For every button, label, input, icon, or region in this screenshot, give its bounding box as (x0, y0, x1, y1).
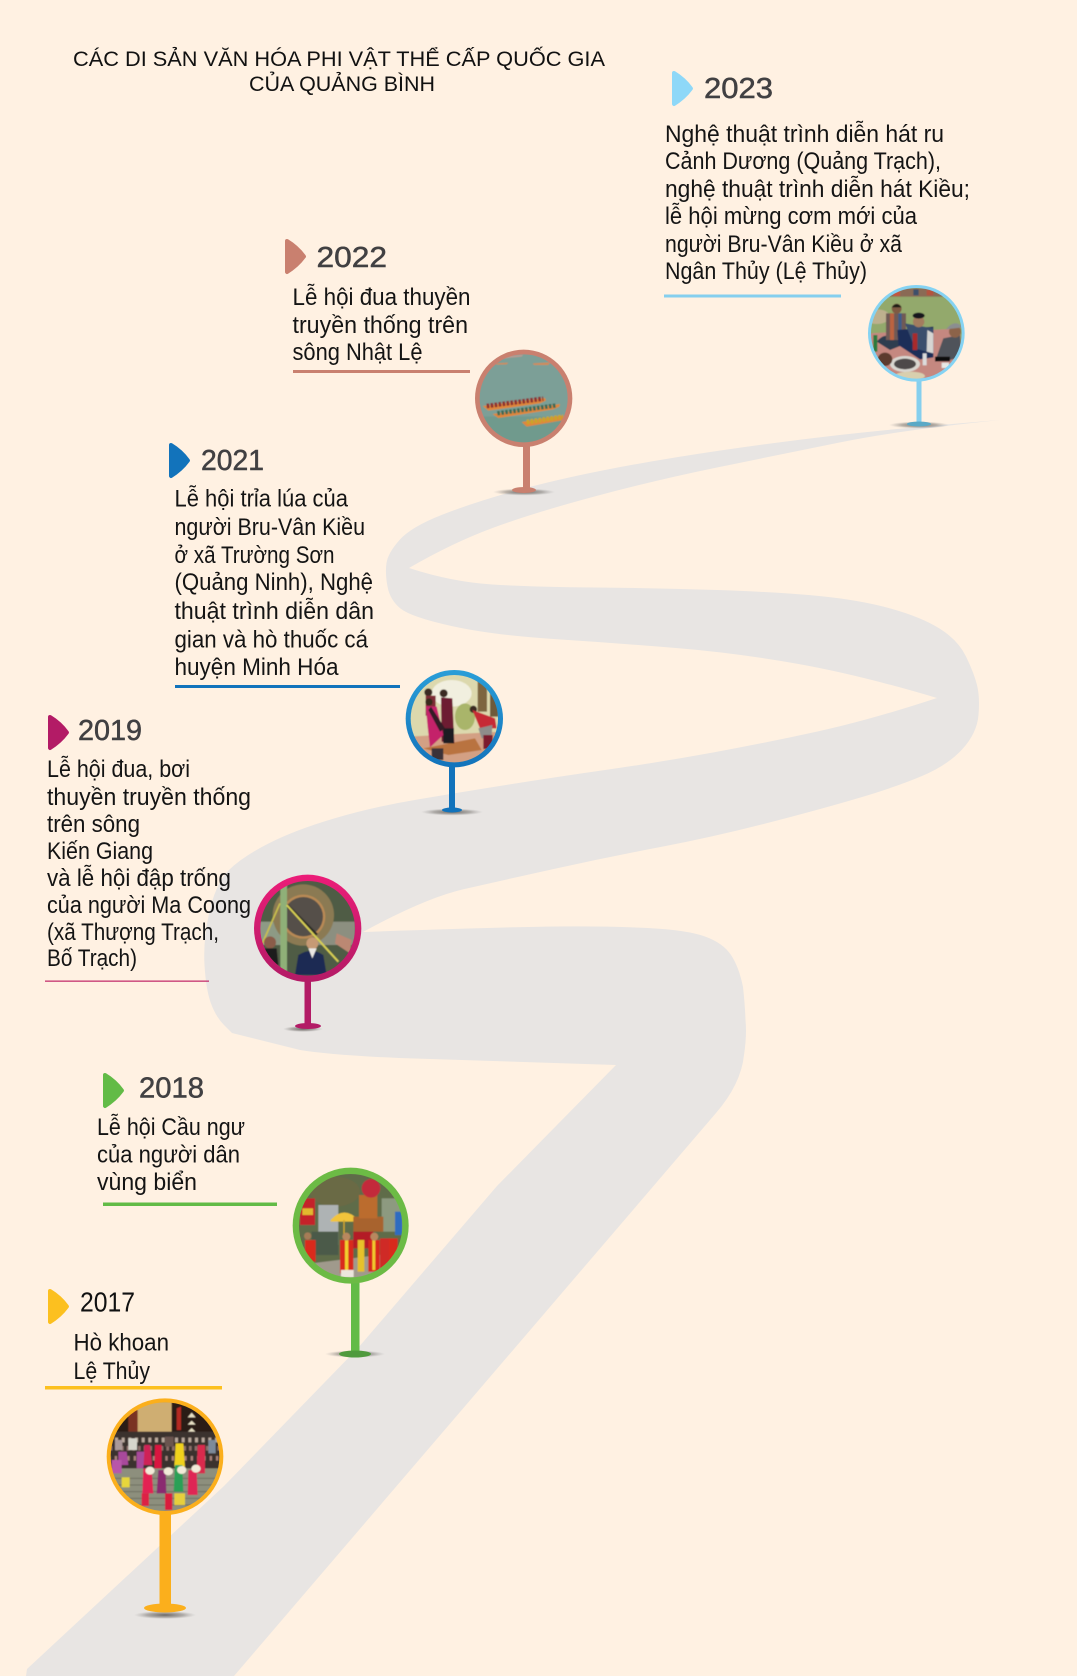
year 2021: 2021 (201, 445, 264, 477)
text 2021: thuật trình diễn dân (174, 598, 374, 625)
text 2023: Ngân Thủy (Lệ Thủy) (665, 258, 867, 285)
underline 2022 (293, 370, 470, 373)
underline 2018 (103, 1202, 277, 1206)
year 2023: 2023 (704, 73, 773, 105)
pin 2021 (406, 670, 503, 816)
text 2023: người Bru-Vân Kiều ở xã (665, 231, 903, 258)
pin 2019 (254, 875, 361, 1032)
title (73, 47, 605, 96)
icon: arrow 2019 (50, 717, 67, 748)
year 2019: 2019 (78, 715, 142, 747)
underline 2017 (45, 1386, 222, 1390)
milestone 2017 (45, 1286, 223, 1619)
milestone 2022 (287, 241, 573, 496)
text 2023 (665, 121, 970, 285)
text 2021: (Quảng Ninh), Nghệ (174, 569, 373, 596)
text 2021: ở xã Trường Sơn (174, 542, 334, 569)
pin 2018 (293, 1168, 409, 1358)
text 2019: Kiến Giang (47, 838, 153, 865)
icon: arrow 2023 (674, 73, 691, 104)
text 2021: Lễ hội trỉa lúa của (174, 486, 349, 512)
text 2019: thuyền truyền thống (47, 784, 251, 811)
text 2019: trên sông (47, 811, 140, 838)
icon: arrow 2018 (105, 1075, 122, 1106)
text 2021: gian và hò thuốc cá (174, 626, 369, 654)
text 2018: của người dân (97, 1142, 240, 1168)
year 2017: 2017 (80, 1286, 135, 1318)
photo: Bru-Van Kieu elders (863, 283, 967, 383)
milestone 2023 (664, 73, 970, 428)
text 2021 (174, 486, 374, 681)
pin 2017 (107, 1398, 223, 1619)
text 2019: và lễ hội đập trống (47, 865, 231, 892)
text 2023: Cảnh Dương (Quảng Trạch), (665, 148, 941, 175)
pin 2023 (863, 283, 967, 428)
title: CÁC DI SẢN VĂN HÓA PHI VẬT THỂ CẤP QUỐC GIA (73, 47, 605, 71)
milestone 2021 (171, 445, 503, 816)
text 2019: Bố Trạch) (47, 945, 137, 972)
pin 2022 (475, 350, 573, 496)
text 2019: của người Ma Coong (47, 892, 251, 919)
icon: arrow 2021 (171, 445, 188, 476)
milestone 2018 (97, 1072, 409, 1358)
underline 2023 (664, 294, 841, 298)
text 2023: nghệ thuật trình diễn hát Kiều; (665, 176, 970, 203)
text 2022: truyền thống trên (292, 312, 468, 339)
text 2018: Lễ hội Cầu ngư (97, 1114, 245, 1141)
text 2023: lễ hội mừng cơm mới của (665, 203, 918, 230)
milestone 2019 (45, 715, 361, 1032)
text 2021: huyện Minh Hóa (174, 654, 339, 681)
text 2019: (xã Thượng Trạch, (47, 919, 219, 946)
title: CỦA QUẢNG BÌNH (249, 72, 435, 96)
text 2021: người Bru-Vân Kiều (174, 514, 365, 541)
winding road (26, 420, 1000, 1676)
icon: arrow 2022 (287, 241, 304, 272)
photo: drum festival of Ma Coong people (254, 875, 361, 982)
text 2017: Lệ Thủy (74, 1358, 150, 1385)
year 2018: 2018 (139, 1072, 204, 1104)
year 2022: 2022 (316, 242, 387, 274)
underline 2021 (175, 685, 400, 688)
photo: rice sowing festival (406, 670, 503, 767)
photo: fishing festival procession (293, 1168, 409, 1284)
text 2022: Lễ hội đua thuyền (292, 284, 470, 311)
icon: arrow 2017 (50, 1291, 67, 1322)
photo: Ho khoan singers on steps (107, 1398, 223, 1515)
text 2019 (47, 756, 251, 972)
text 2017 (74, 1330, 169, 1385)
text 2022 (292, 284, 470, 366)
text 2022: sông Nhật Lệ (292, 339, 422, 366)
text 2018: vùng biển (97, 1169, 197, 1196)
text 2017: Hò khoan (74, 1330, 169, 1356)
text 2023: Nghệ thuật trình diễn hát ru (665, 121, 944, 148)
photo: boat race on Nhat Le river (475, 350, 573, 447)
text 2019: Lễ hội đua, bơi (47, 756, 190, 783)
underline 2019 (45, 980, 209, 982)
text 2018 (97, 1114, 245, 1196)
